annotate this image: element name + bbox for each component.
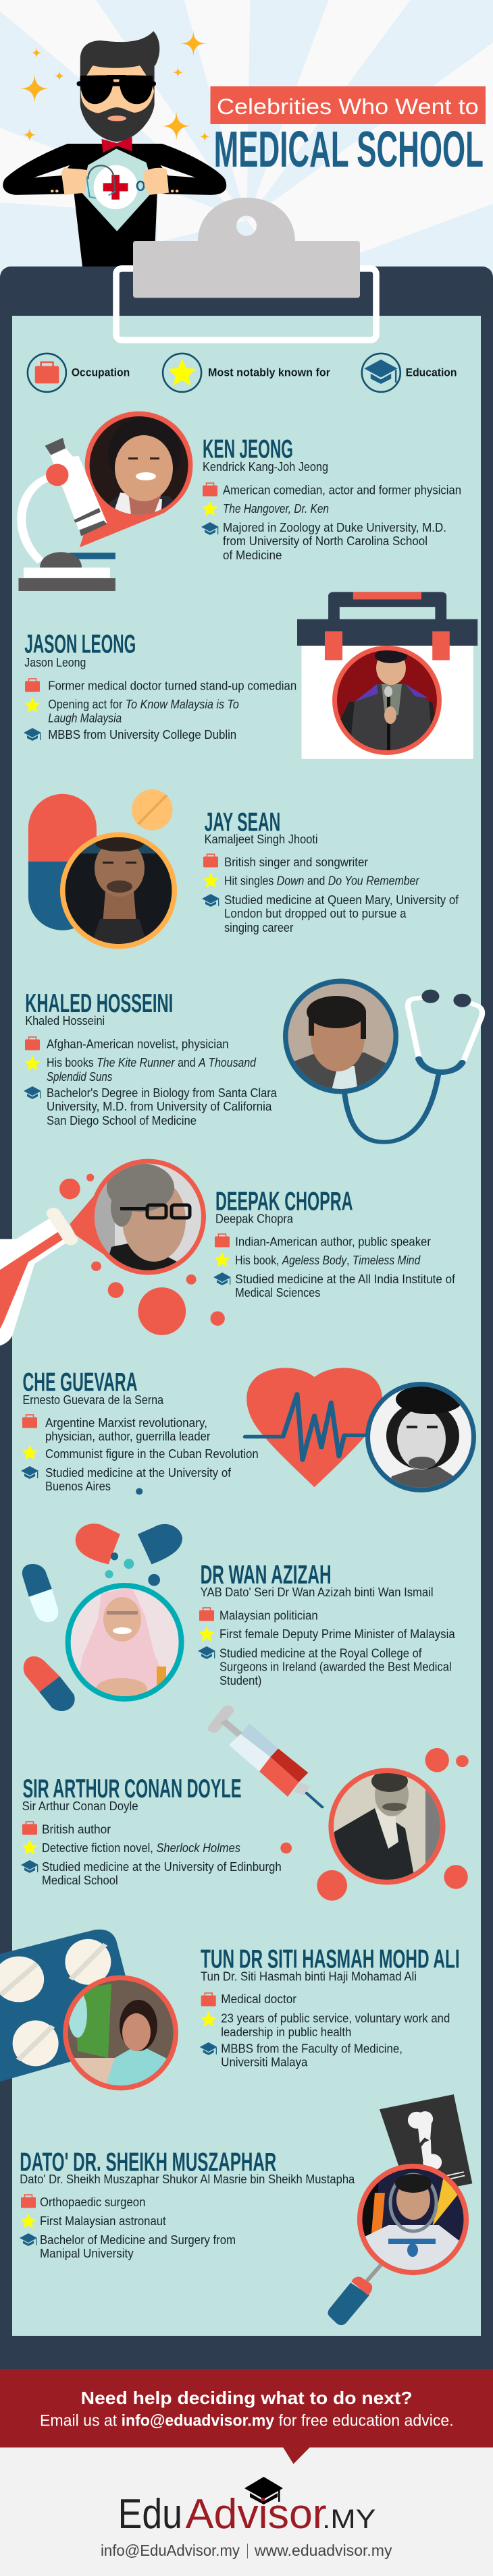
panel: Dato' Dr. Sheikh Muszaphar [20,2094,472,2325]
details [24,679,296,741]
portrait placeholder [65,837,172,944]
panel: Ken Jeong [18,412,461,591]
details: Surgeons in Ireland (awarded the Best Medical [219,1660,452,1673]
portrait placeholder [89,416,188,515]
portrait placeholder [370,1387,471,1488]
details: Indian-American author, public speaker [235,1235,431,1248]
head [80,31,159,142]
syringe and bubbles [214,1710,469,1901]
details [201,483,461,562]
details: Student) [219,1674,261,1687]
details: of Medicine [223,549,282,562]
details: Majored in Zoology at Duke University, M.D. [223,521,446,534]
legend: education: Education [406,366,457,379]
details [21,1415,259,1493]
details: His books The Kite Runner and A Thousand [47,1056,257,1069]
details: Malaysian politician [219,1608,318,1622]
panel: Dr Wan Azizah [22,1523,456,1711]
portrait placeholder [95,1163,201,1270]
details: Medical Sciences [235,1286,320,1299]
details: leadership in public health [221,2025,351,2039]
details: Bachelor of Medicine and Surgery from [40,2233,236,2247]
EduAdvisor logo [118,2477,375,2538]
sunglasses [77,81,156,86]
details: Argentine Marxist revolutionary, [45,1416,207,1430]
panel: Tun Dr Siti Hasmah [0,1930,460,2092]
scattered pills [22,1523,182,1711]
full name: YAB Dato' Seri Dr Wan Azizah binti Wan Ismail [201,1586,434,1599]
logo cap [244,2477,283,2504]
details: First female Deputy Prime Minister of Malaysia [219,1627,456,1641]
details [24,1037,278,1127]
sparkle stars [20,30,210,142]
capsule and tablet [28,789,173,930]
details [200,1992,450,2069]
details: Detective fiction novel, Sherlock Holmes [42,1841,240,1855]
details: The Hangover, Dr. Ken [223,502,329,515]
details: Studied medicine at the Royal College of [219,1646,422,1660]
details: Buenos Aires [45,1480,111,1493]
full name: Ernesto Guevara de la Serna [23,1393,164,1407]
clipboard loop [116,269,376,340]
title banner [211,86,486,124]
full name: Tun Dr. Siti Hasmah binti Haji Mohamad Ali [201,1969,417,1983]
portrait placeholder [362,2168,463,2270]
details: Laugh Malaysia [48,711,122,725]
details: London but dropped out to pursue a [224,907,407,920]
call to action band: Email us at info@eduadvisor.my for free education advice. [40,2412,454,2430]
details [21,1822,282,1887]
legend: known for: Most notably known for [208,366,330,379]
sunburst header background [0,0,493,275]
portrait placeholder [70,1588,179,1696]
details: Communist figure in the Cuban Revolution [45,1447,259,1461]
name: KHALED HOSSEINI [25,989,173,1018]
call to action band [0,2369,493,2464]
full name: Khaled Hosseini [25,1014,105,1028]
full name: Jason Leong [24,656,86,669]
panel: Sir Arthur Conan Doyle [21,1710,469,1901]
details: physician, author, guerrilla leader [45,1430,210,1443]
name: SIR ARTHUR CONAN DOYLE [23,1774,242,1803]
hands [61,167,169,195]
illustration: hipster doctor [3,30,226,267]
portrait placeholder [334,1773,440,1880]
full name: Kendrick Kang-Joh Jeong [203,460,328,474]
details: Studied medicine at Queen Mary, University of [224,893,459,907]
legend [28,354,457,392]
details [213,1234,456,1299]
full name: Dato' Dr. Sheikh Muszaphar Shukor Al Masrie bin Sheikh Mustapha [20,2173,355,2186]
name: DR WAN AZIZAH [201,1561,332,1590]
panel: Che Guevara [21,1368,476,1495]
jacket [3,144,226,267]
legend: education [362,354,457,392]
details: Medical doctor [221,1992,296,2006]
bone saw handle [328,2264,382,2325]
name: DATO' DR. SHEIKH MUSZAPHAR [20,2148,276,2177]
details: singing career [224,921,293,934]
details: Manipal University [40,2247,134,2260]
details: San Diego School of Medicine [47,1114,197,1127]
details: Studied medicine at the All India Institute of [235,1272,456,1286]
bow tie [101,137,132,152]
microscope pin [18,412,192,591]
details: First Malaysian astronaut [40,2214,166,2228]
details: from University of North Carolina School [223,534,427,548]
full name: Deepak Chopra [215,1212,294,1225]
details: Studied medicine at the University of [45,1466,232,1480]
details: MBBS from University College Dublin [48,728,236,741]
details: Bachelor's Degree in Biology from Santa Clara [47,1086,278,1100]
contact line: info@EduAdvisor.my [101,2542,240,2559]
details: Studied medicine at the University of Edinburgh [42,1860,282,1874]
details: University, M.D. from University of California [47,1100,272,1113]
details: Afghan-American novelist, physician [47,1037,229,1051]
details [198,1608,456,1687]
EduAdvisor logo: Edu [118,2491,182,2538]
details: 23 years of public service, voluntary work and [221,2011,450,2025]
name: JAY SEAN [205,808,280,837]
legend: occupation [28,354,130,392]
portrait placeholder [68,1980,174,2085]
call to action band: Need help deciding what to do next? [81,2388,413,2408]
details: Universiti Malaya [221,2055,308,2069]
stethoscope [344,990,482,1142]
name: JASON LEONG [24,630,136,659]
panel: Jason Leong [24,592,477,759]
shirt with cross [82,148,154,231]
name: CHE GUEVARA [23,1368,138,1397]
details: MBBS from the Faculty of Medicine, [221,2042,403,2055]
flask and bubbles [0,1174,225,1346]
heart with pulse [136,1368,382,1495]
portrait placeholder [337,650,437,750]
name: KEN JEONG [203,435,293,464]
details: British author [42,1822,111,1836]
panel: Deepak Chopra [0,1159,456,1346]
clipboard paper [12,316,481,2336]
details: His book, Ageless Body, Timeless Mind [235,1254,421,1267]
details: British singer and songwriter [224,856,368,869]
toolbox [297,592,477,759]
full name: Sir Arthur Conan Doyle [22,1799,138,1813]
legend: occupation: Occupation [72,366,130,379]
details: Medical School [42,1874,118,1887]
details: Former medical doctor turned stand-up comedian [48,679,296,692]
details: Splendid Suns [47,1070,112,1084]
full name: Kamaljeet Singh Jhooti [205,833,318,846]
panel: Jay Sean [28,789,459,949]
clipboard clamp [133,198,360,298]
legend: known for [163,354,330,392]
details: Opening act for To Know Malaysia is To [48,698,239,711]
details: American comedian, actor and former physician [223,483,461,497]
EduAdvisor logo: Advisor [186,2491,327,2538]
EduAdvisor logo: .MY [322,2504,375,2534]
title banner: Celebrities Who Went to [217,94,479,119]
details: Hit singles Down and Do You Remember [224,874,420,888]
x-ray film [380,2094,472,2196]
name: DEEPAK CHOPRA [215,1187,353,1216]
details [202,854,459,934]
contact line [101,2542,392,2559]
contact line: www.eduadvisor.my [254,2542,392,2559]
panel: Khaled Hosseini [24,978,482,1142]
blister pack [0,1930,129,2081]
details [20,2195,236,2260]
details: Orthopaedic surgeon [40,2195,145,2209]
portrait placeholder [288,984,393,1089]
